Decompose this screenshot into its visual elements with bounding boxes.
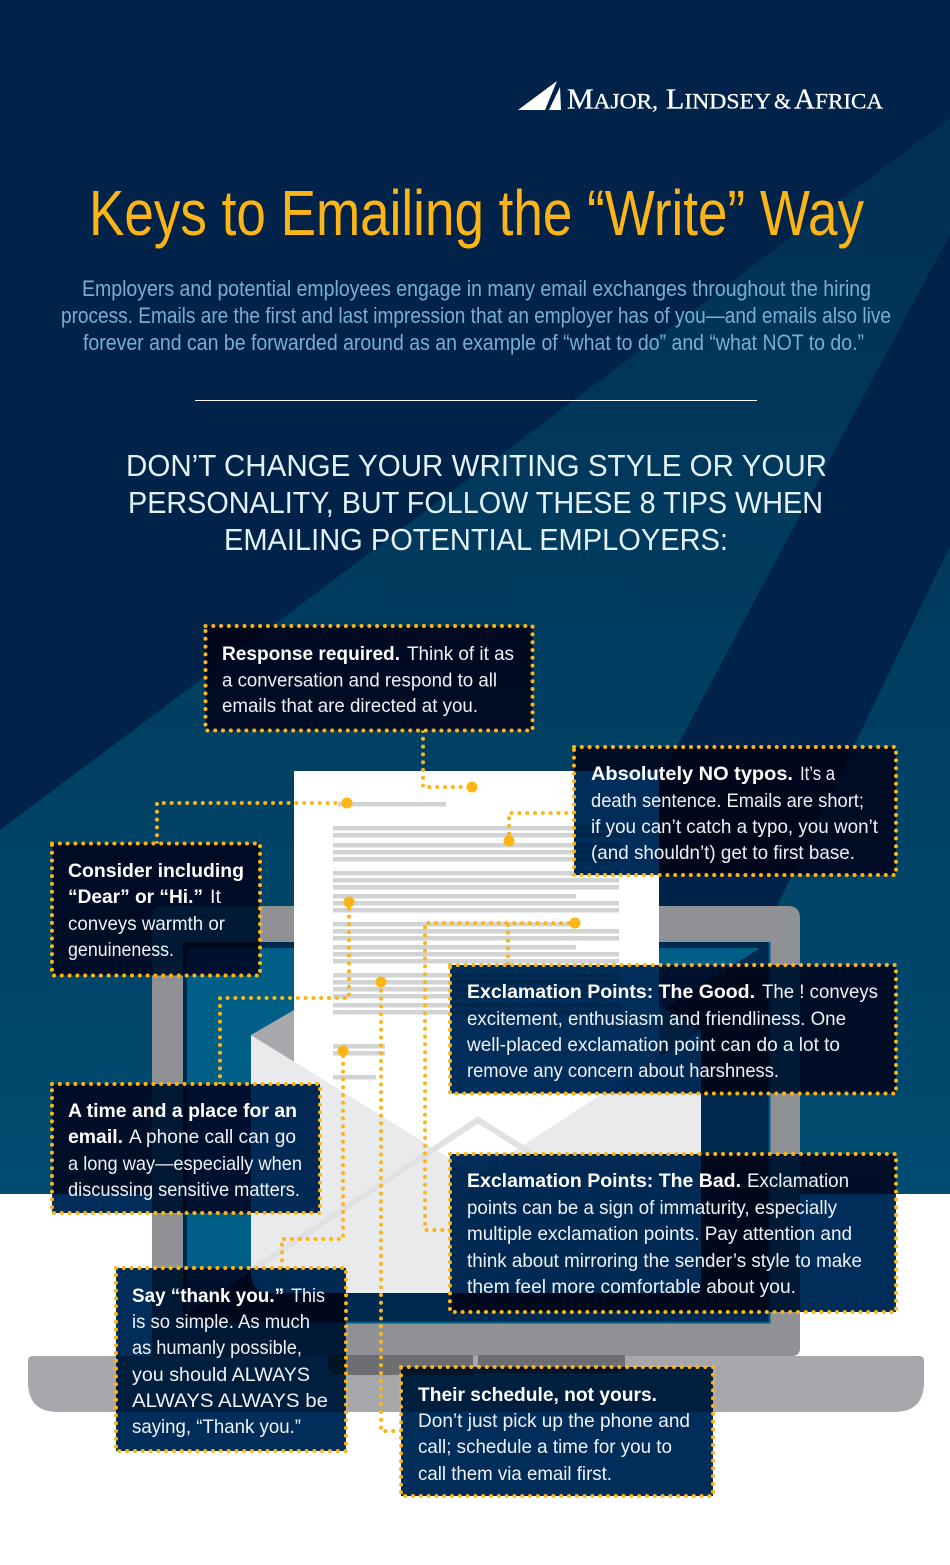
tip: response required: Think of it as xyxy=(407,643,514,665)
background: dark navy with light beams xyxy=(0,0,950,1194)
tip: say thank you: you should ALWAYS xyxy=(132,1364,310,1386)
tip: say thank you: Say “thank you.” xyxy=(132,1285,284,1307)
subheading xyxy=(126,449,827,557)
tip: a time and a place: A phone call can go xyxy=(129,1126,296,1148)
tip: exclamation points the good: Exclamation Points: The Good. xyxy=(467,981,755,1003)
tip: response required: emails that are directed at you. xyxy=(222,695,478,717)
tip: their schedule not yours: Their schedule, not yours. xyxy=(418,1384,657,1406)
tip: consider including dear or hi: “Dear” or “Hi.” xyxy=(68,886,203,908)
intro paragraph: forever and can be forwarded around as an example of “what to do” and “what NOT to do.” xyxy=(83,330,864,355)
tip: exclamation points the bad: think about mirroring the sender’s style to make xyxy=(467,1250,862,1272)
intro paragraph: Employers and potential employees engage in many email exchanges throughout the hiring xyxy=(82,276,871,301)
laptop hinge notch xyxy=(328,1355,625,1375)
tip: exclamation points the good: excitement, enthusiasm and friendliness. One xyxy=(467,1008,846,1030)
tip: response required: Response required. xyxy=(222,643,400,665)
intro paragraph xyxy=(61,276,891,355)
tip: consider including dear or hi xyxy=(52,844,260,976)
tip: consider including dear or hi: conveys warmth or xyxy=(68,913,225,935)
tip: exclamation points the good xyxy=(450,965,896,1094)
tip: exclamation points the bad: multiple exclamation points. Pay attention and xyxy=(467,1223,852,1245)
logo: Major, Lindsey & Africa xyxy=(518,81,883,116)
tip: consider including dear or hi: genuineness. xyxy=(68,939,174,961)
tip: say thank you: is so simple. As much xyxy=(132,1311,310,1333)
laptop lid xyxy=(152,906,800,1356)
laptop illustration xyxy=(28,906,924,1412)
subheading: DON’T CHANGE YOUR WRITING STYLE OR YOUR xyxy=(126,449,827,483)
tip: exclamation points the bad: them feel more comfortable about you. xyxy=(467,1276,796,1298)
email document xyxy=(294,771,659,1181)
tip: their schedule not yours: call; schedule a time for you to xyxy=(418,1436,672,1458)
tip: exclamation points the good: well-placed exclamation point can do a lot to xyxy=(466,1034,840,1056)
logo: Major, Lindsey & Africa: & xyxy=(774,88,791,114)
tip: a time and a place xyxy=(52,1084,320,1213)
tip: their schedule not yours: call them via email first. xyxy=(418,1463,612,1485)
tip: exclamation points the good: remove any concern about harshness. xyxy=(467,1060,779,1082)
logo: Major, Lindsey & Africa: AFRICA xyxy=(794,84,883,116)
tip: no typos: Absolutely NO typos. xyxy=(591,763,793,785)
envelope front xyxy=(251,1030,701,1293)
logo: Major, Lindsey & Africa: LINDSEY xyxy=(666,84,771,116)
subheading: PERSONALITY, BUT FOLLOW THESE 8 TIPS WHEN xyxy=(128,486,823,520)
tip: a time and a place: a long way—especially when xyxy=(68,1153,302,1175)
tip: consider including dear or hi: It xyxy=(210,886,222,908)
tip: a time and a place: A time and a place for an xyxy=(68,1100,297,1122)
tip: response required: a conversation and respond to all xyxy=(222,670,497,692)
tip: no typos: It’s a xyxy=(800,763,835,785)
tip: exclamation points the good: The ! conveys xyxy=(762,981,878,1003)
tip: no typos: death sentence. Emails are short; xyxy=(591,790,864,812)
tip: say thank you: ALWAYS ALWAYS be xyxy=(132,1390,328,1412)
laptop base xyxy=(28,1356,924,1412)
tip: consider including dear or hi: Consider including xyxy=(68,860,244,882)
tip: say thank you: This xyxy=(291,1285,325,1307)
tip: no typos xyxy=(574,747,896,875)
connector end dots xyxy=(338,782,580,1056)
tip: a time and a place: discussing sensitive matters. xyxy=(68,1179,300,1201)
tip: say thank you: as humanly possible, xyxy=(132,1337,302,1359)
tip: exclamation points the bad: points can be a sign of immaturity, especially xyxy=(467,1197,837,1219)
tip: a time and a place: email. xyxy=(68,1126,123,1148)
dotted connectors xyxy=(157,731,575,1431)
tip: exclamation points the bad: Exclamation xyxy=(747,1170,849,1192)
tip: their schedule not yours: Don’t just pick up the phone and xyxy=(418,1410,690,1432)
logo: Major, Lindsey & Africa: MAJOR, xyxy=(567,84,658,116)
envelope back flaps xyxy=(251,1005,701,1062)
laptop screen xyxy=(183,942,770,1324)
tip: exclamation points the bad: Exclamation Points: The Bad. xyxy=(467,1170,741,1192)
tip: exclamation points the bad xyxy=(450,1154,896,1312)
tip: say thank you: saying, “Thank you.” xyxy=(132,1416,301,1438)
tip: no typos: if you can’t catch a typo, you won’t xyxy=(591,816,879,838)
tip: their schedule not yours xyxy=(401,1367,713,1496)
tip: say thank you xyxy=(116,1268,346,1451)
subheading: EMAILING POTENTIAL EMPLOYERS: xyxy=(224,523,728,557)
tip: no typos: (and shouldn’t) get to first base. xyxy=(591,842,855,864)
tip: response required xyxy=(206,626,532,730)
